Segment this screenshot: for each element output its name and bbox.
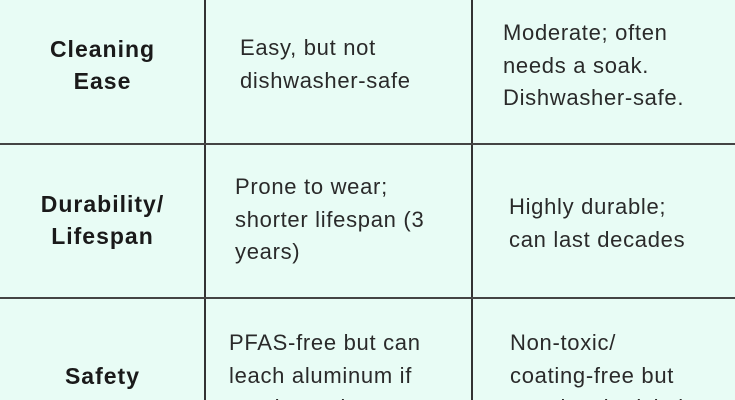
cell: safety col2 bbox=[229, 330, 421, 400]
cell: durability col3: can last decades bbox=[509, 226, 685, 252]
row header: Cleaning Ease: Ease bbox=[74, 68, 131, 94]
cell: cleaning col3: Dishwasher-safe. bbox=[503, 85, 684, 110]
cell: cleaning col3 bbox=[503, 20, 684, 110]
row header: Cleaning Ease: Cleaning bbox=[50, 36, 155, 62]
cell: safety col2: leach aluminum if bbox=[229, 362, 412, 388]
cell: durability col2: shorter lifespan (3 bbox=[235, 206, 424, 232]
cell: cleaning col2 bbox=[240, 35, 411, 92]
cell: cleaning col3: needs a soak. bbox=[503, 52, 649, 78]
row header: Durability: Lifespan bbox=[51, 223, 154, 249]
cell: durability col3: Highly durable; bbox=[509, 194, 666, 219]
cell: durability col3 bbox=[509, 194, 685, 252]
row header: Cleaning Ease bbox=[50, 36, 155, 94]
row header: Durability bbox=[41, 191, 164, 249]
cell: durability col2: years) bbox=[235, 239, 300, 264]
cell: safety col3: Non-toxic/ bbox=[510, 330, 616, 355]
cell: safety col2: PFAS-free but can bbox=[229, 330, 421, 355]
row header: Safety: Safety bbox=[65, 363, 140, 389]
cell: cleaning col2: dishwasher-safe bbox=[240, 68, 411, 92]
cell: durability col2: Prone to wear; bbox=[235, 174, 388, 199]
cell: safety col3: coating-free but bbox=[510, 362, 674, 388]
cell: safety col3 bbox=[510, 330, 684, 400]
row header: Durability: Durability/ bbox=[41, 191, 164, 217]
cell: cleaning col2: Easy, but not bbox=[240, 35, 376, 60]
cell: cleaning col3: Moderate; often bbox=[503, 20, 668, 45]
cell: durability col2 bbox=[235, 174, 424, 264]
